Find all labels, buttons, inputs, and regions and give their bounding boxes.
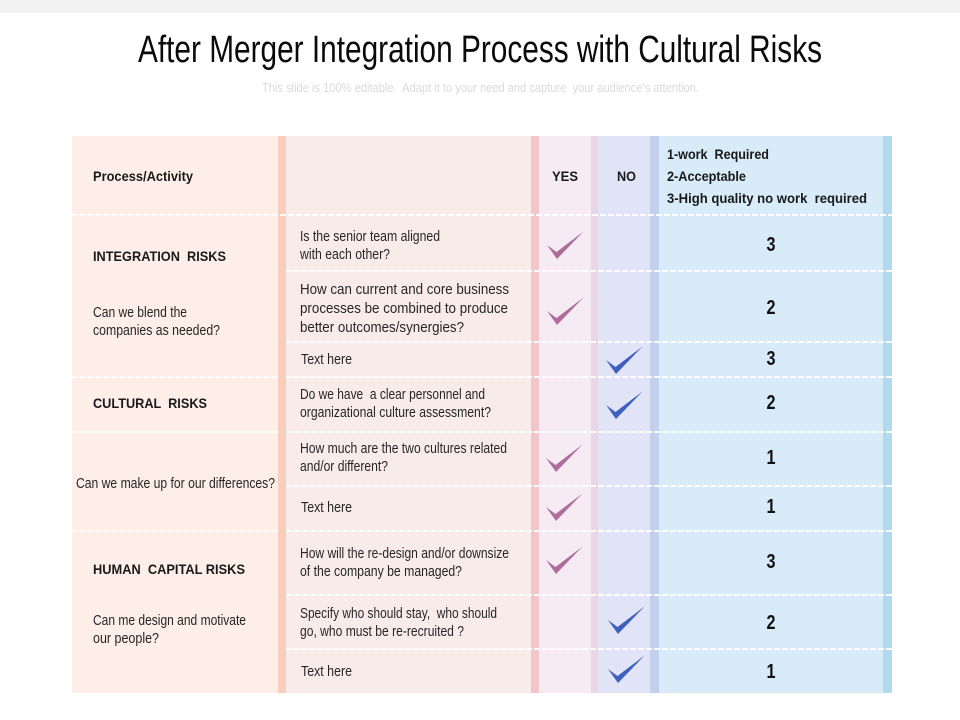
column backgrounds	[72, 136, 892, 693]
process and activity column: our people?	[93, 630, 159, 647]
header row: 3-High quality no work required	[667, 190, 867, 206]
subtitle: This slide is 100% editable. Adapt it to your need and capture your audience’s attention.	[262, 80, 699, 95]
questions column: How much are the two cultures related	[300, 440, 507, 457]
questions column: processes be combined to produce	[300, 300, 508, 317]
questions column: go, who must be re-recruited ?	[300, 623, 464, 640]
process and activity column: Can me design and motivate	[93, 612, 246, 629]
header row: Process/Activity	[93, 168, 193, 184]
questions column: Text here	[301, 351, 352, 368]
rating numbers: 2	[766, 392, 776, 414]
no check marks	[606, 346, 644, 683]
table	[72, 136, 892, 693]
rating numbers: 1	[766, 661, 776, 683]
questions column	[299, 228, 509, 680]
header row: YES	[552, 168, 578, 184]
process and activity column: HUMAN CAPITAL RISKS	[93, 561, 245, 577]
process and activity column: INTEGRATION RISKS	[93, 248, 226, 264]
questions column: How can current and core business	[300, 281, 509, 298]
questions column: of the company be managed?	[300, 563, 462, 580]
questions column: Text here	[301, 663, 352, 680]
rating numbers: 3	[766, 234, 776, 256]
rating numbers: 3	[766, 551, 776, 573]
questions column: Do we have a clear personnel and	[300, 386, 485, 403]
process and activity column: Can we blend the	[93, 304, 187, 321]
header row: 2-Acceptable	[667, 168, 746, 184]
rating numbers: 2	[766, 297, 776, 319]
yes check marks	[546, 232, 584, 574]
rating numbers: 1	[766, 496, 776, 518]
process and activity column: companies as needed?	[93, 322, 220, 339]
questions column: How will the re-design and/or downsize	[300, 545, 509, 562]
process and activity column	[76, 248, 275, 647]
rating numbers: 3	[766, 348, 776, 370]
header row	[93, 146, 867, 206]
questions column: organizational culture assessment?	[300, 404, 491, 421]
header row: 1-work Required	[667, 146, 769, 162]
rating numbers: 1	[766, 447, 776, 469]
top grey band	[0, 0, 960, 13]
questions column: with each other?	[299, 246, 390, 263]
questions column: and/or different?	[300, 458, 388, 475]
questions column: better outcomes/synergies?	[300, 319, 464, 336]
questions column: Specify who should stay, who should	[300, 605, 497, 622]
header row: NO	[617, 168, 636, 184]
process and activity column: CULTURAL RISKS	[93, 395, 207, 411]
process and activity column: Can we make up for our differences?	[76, 475, 275, 492]
questions column: Is the senior team aligned	[300, 228, 440, 245]
questions column: Text here	[301, 499, 352, 516]
rating numbers: 2	[766, 612, 776, 634]
rating numbers	[766, 234, 776, 683]
